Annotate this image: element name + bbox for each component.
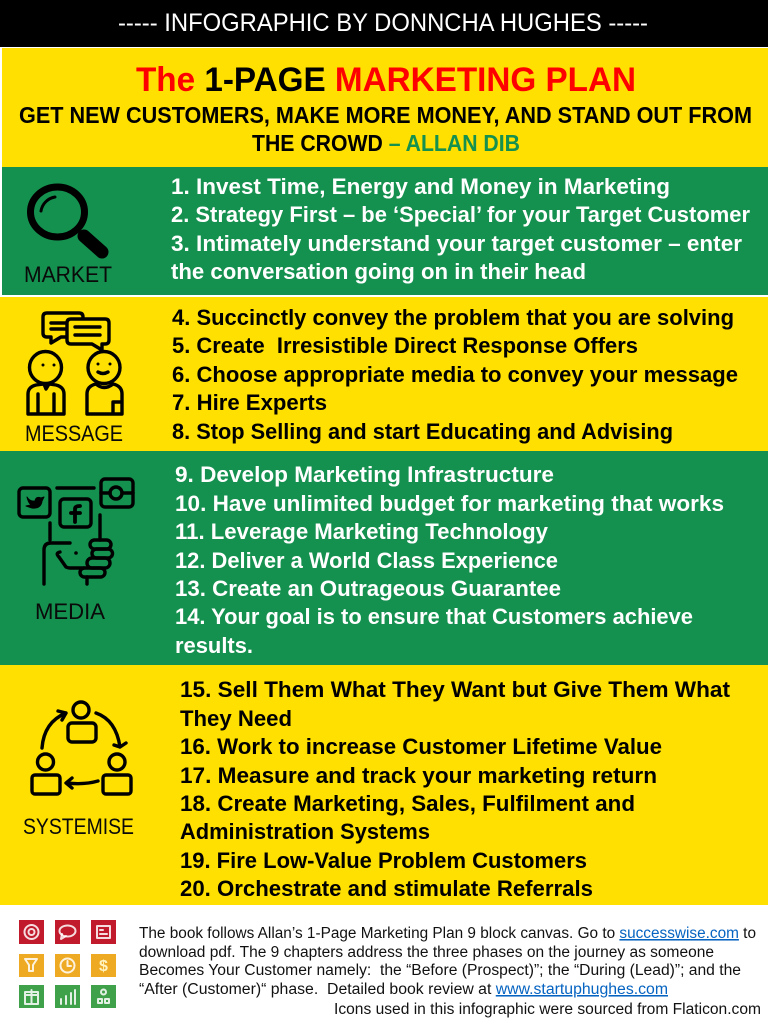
market list: 3. Intimately understand your target customer – enter (171, 231, 742, 256)
label: media: MEDIA (35, 599, 105, 624)
systemise list: They Need (180, 706, 292, 731)
media list (175, 462, 724, 658)
message list: 4. Succinctly convey the problem that you are solving (172, 305, 734, 330)
market background (2, 167, 768, 295)
panel: footer (19, 920, 761, 1018)
message list: 8. Stop Selling and start Educating and Advising (172, 419, 673, 444)
icon: funnel (19, 954, 44, 977)
footer text (139, 925, 761, 1018)
media list: 10. Have unlimited budget for marketing that works (175, 491, 724, 516)
icon: face details (42, 362, 112, 366)
panel: systemise (0, 665, 768, 905)
footer text: Becomes Your Customer namely: the “Before (Prospect)”; the “During (Lead)”; and the (139, 962, 741, 979)
market list: the conversation going on in their head (171, 259, 586, 284)
icon: magnifying glass (30, 187, 102, 252)
icon: speech bubble (55, 920, 80, 944)
media list: 13. Create an Outrageous Guarantee (175, 576, 561, 601)
icon: growth bars (55, 985, 80, 1008)
title background (2, 48, 768, 167)
systemise background (0, 665, 768, 905)
market list: 1. Invest Time, Energy and Money in Marketing (171, 174, 670, 199)
icon: org chart (91, 985, 116, 1008)
footer text: Icons used in this infographic were sourced from Flaticon.com (334, 1001, 761, 1018)
footer text: download pdf. The 9 chapters address the three phases on the journey as someone (139, 944, 714, 961)
banner text: ----- INFOGRAPHIC BY DONNCHA HUGHES ----- (118, 9, 648, 37)
heading: The 1-PAGE MARKETING PLAN (136, 61, 636, 99)
systemise list: 15. Sell Them What They Want but Give Them What (180, 677, 731, 702)
footer text: “After (Customer)“ phase. Detailed book review at www.startuphughes.com (139, 981, 668, 998)
label: message: MESSAGE (25, 421, 123, 446)
icon: two people talking (28, 313, 122, 414)
systemise list (180, 677, 731, 901)
icon: hand dot (74, 551, 78, 555)
systemise list: 20. Orchestrate and stimulate Referrals (180, 876, 593, 901)
market list (171, 174, 750, 284)
message list: 5. Create Irresistible Direct Response Offers (172, 333, 638, 358)
media list: 14. Your goal is to ensure that Customers achieve (175, 604, 693, 629)
media list: 12. Deliver a World Class Experience (175, 548, 558, 573)
panel: media (0, 451, 768, 665)
nine block canvas icons (19, 920, 116, 1008)
systemise list: 16. Work to increase Customer Lifetime Value (180, 734, 662, 759)
market list: 2. Strategy First – be ‘Special’ for your Target Customer (171, 202, 750, 227)
media list: 11. Leverage Marketing Technology (175, 519, 549, 544)
panel: title (2, 48, 768, 167)
panel: top banner (0, 0, 768, 47)
icon: target (19, 920, 44, 944)
media list: results. (175, 633, 253, 658)
banner background (0, 0, 768, 47)
panel: market (2, 167, 768, 295)
media list: 9. Develop Marketing Infrastructure (175, 462, 554, 487)
icon: people cycle (32, 702, 131, 794)
message list: 6. Choose appropriate media to convey your message (172, 362, 738, 387)
message background (0, 297, 768, 451)
label: market: MARKET (24, 262, 112, 287)
subtitle line 2: THE CROWD – ALLAN DIB (252, 130, 520, 156)
icon: newspaper (91, 920, 116, 944)
media background (0, 451, 768, 665)
icon: dollar: $ (99, 958, 108, 975)
panel: message (0, 297, 768, 451)
icon: hand holding social media (19, 479, 133, 584)
systemise list: Administration Systems (180, 819, 430, 844)
message list: 7. Hire Experts (172, 390, 327, 415)
systemise list: 17. Measure and track your marketing return (180, 763, 657, 788)
icon: clock coin (55, 954, 80, 977)
icon: gift (19, 985, 44, 1008)
systemise list: 19. Fire Low-Value Problem Customers (180, 848, 587, 873)
label: systemise: SYSTEMISE (23, 814, 134, 839)
systemise list: 18. Create Marketing, Sales, Fulfilment and (180, 791, 635, 816)
message list (172, 305, 738, 444)
footer text: The book follows Allan’s 1-Page Marketing Plan 9 block canvas. Go to successwise.com to (139, 925, 756, 942)
